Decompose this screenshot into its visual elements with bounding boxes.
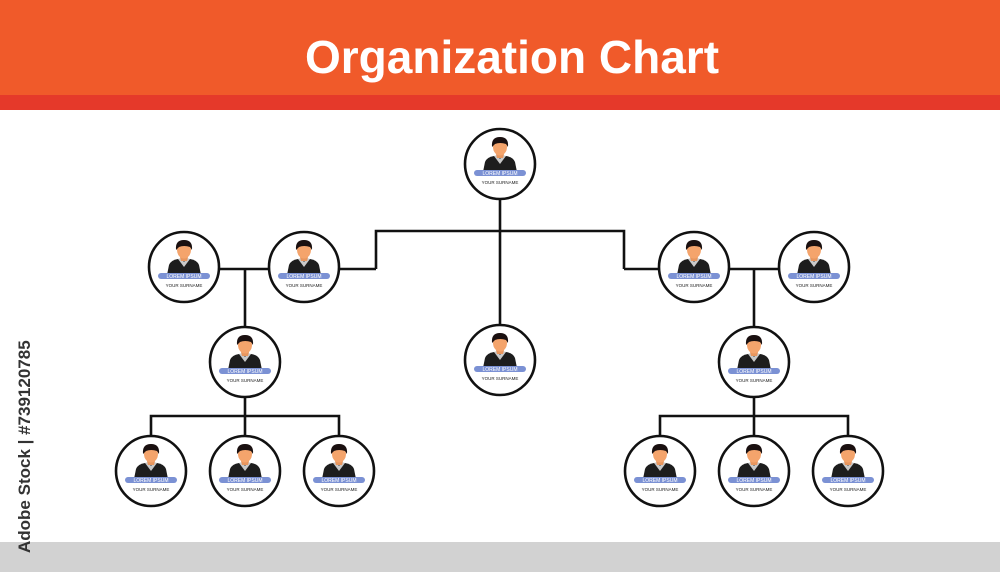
node: right 2 [779,232,849,302]
node: bottom right 1: YOUR SURNAME [642,487,678,492]
node: bottom left 2: YOUR SURNAME [227,487,263,492]
footer bar [0,542,1000,572]
node: left 2: YOUR SURNAME [286,283,322,288]
node: left 2 [269,232,339,302]
node: bottom right 3 [813,436,883,506]
node: CEO: YOUR SURNAME [482,180,518,185]
node: bottom right 3: YOUR SURNAME [830,487,866,492]
node: left manager: YOUR SURNAME [227,378,263,383]
header banner [0,0,1000,110]
node: bottom left 3: YOUR SURNAME [321,487,357,492]
node: right 2: YOUR SURNAME [796,283,832,288]
node: bottom left 2: LOREM IPSUM [227,478,263,484]
connector lines [151,198,848,437]
node: left manager: LOREM IPSUM [227,369,263,375]
node: bottom right 1 [625,436,695,506]
node: center middle: YOUR SURNAME [482,376,518,381]
node: CEO: LOREM IPSUM [482,171,518,177]
node: bottom left 1: YOUR SURNAME [133,487,169,492]
node: right 1: YOUR SURNAME [676,283,712,288]
node: right manager: YOUR SURNAME [736,378,772,383]
node: right 2: LOREM IPSUM [796,274,832,280]
node: bottom right 2: YOUR SURNAME [736,487,772,492]
node: center middle: LOREM IPSUM [482,367,518,373]
node: CEO [465,129,535,199]
watermark id: Adobe Stock | #739120785 [15,340,34,553]
node: bottom left 1 [116,436,186,506]
node: left 1 [149,232,219,302]
node: bottom left 2 [210,436,280,506]
title: Organization Chart [305,31,719,83]
node: right 1 [659,232,729,302]
node: bottom right 2: LOREM IPSUM [736,478,772,484]
node: left 1: YOUR SURNAME [166,283,202,288]
nodes [116,129,883,506]
node: right 1: LOREM IPSUM [676,274,712,280]
node: left 2: LOREM IPSUM [286,274,322,280]
node: right manager [719,327,789,397]
node: bottom right 2 [719,436,789,506]
node: left 1: LOREM IPSUM [166,274,202,280]
node: left manager [210,327,280,397]
node: bottom left 3 [304,436,374,506]
node: bottom right 1: LOREM IPSUM [642,478,678,484]
node: bottom left 1: LOREM IPSUM [133,478,169,484]
node: bottom left 3: LOREM IPSUM [321,478,357,484]
node: right manager: LOREM IPSUM [736,369,772,375]
node: center middle [465,325,535,395]
node: bottom right 3: LOREM IPSUM [830,478,866,484]
